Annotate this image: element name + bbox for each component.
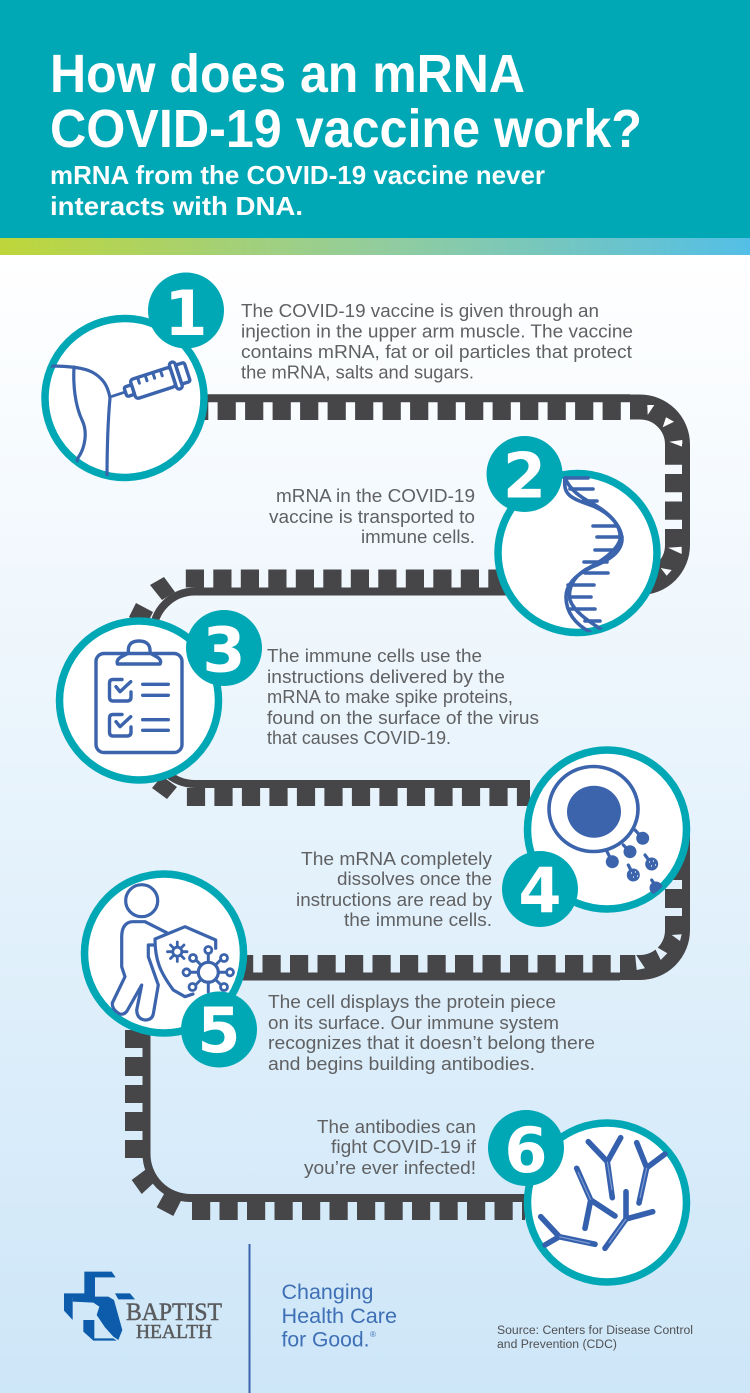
step 2 text	[269, 485, 475, 547]
Baptist Health logo	[64, 1272, 222, 1343]
icon: person with shield against virus	[112, 885, 234, 1020]
step 2 text: mRNA in the COVID-19	[276, 485, 475, 506]
step 3 text: The immune cells use the	[267, 645, 482, 666]
step 1 text	[241, 300, 633, 382]
step 6 text: you’re ever infected!	[304, 1157, 476, 1178]
icon: antibodies	[541, 1138, 665, 1248]
badge 6: 6	[504, 1114, 548, 1187]
step 4 text: The mRNA completely	[301, 848, 493, 869]
badge 1	[148, 272, 224, 350]
source note: Source: Centers for Disease Control	[497, 1325, 693, 1337]
step 5	[84, 874, 257, 1068]
step 5 text: and begins building antibodies.	[268, 1053, 535, 1074]
step 3 text: instructions delivered by the	[267, 666, 505, 687]
step 4	[502, 750, 686, 928]
step 1	[45, 272, 224, 480]
step 1 ring	[45, 318, 204, 478]
source note: and Prevention (CDC)	[497, 1339, 617, 1351]
tagline: Changing	[282, 1281, 374, 1304]
title: How does an mRNA	[50, 44, 525, 104]
source note	[497, 1325, 693, 1351]
logo wordmark: HEALTH	[136, 1321, 212, 1343]
step 3 text: found on the surface of the virus	[267, 707, 539, 728]
step 4 text	[296, 848, 493, 930]
icon: clipboard checklist	[96, 641, 182, 752]
tagline: Health Care	[282, 1305, 397, 1328]
icon: immune cell releasing proteins	[549, 766, 662, 894]
step 6 text: The antibodies can	[317, 1116, 476, 1137]
logo wordmark: BAPTIST	[126, 1299, 222, 1326]
logo wordmark	[126, 1299, 222, 1343]
step 6 ring	[528, 1123, 686, 1282]
title: COVID-19 vaccine work?	[50, 99, 642, 159]
step 3 text: mRNA to make spike proteins,	[267, 686, 513, 707]
step 3 text	[267, 645, 539, 748]
step 1 text: The COVID-19 vaccine is given through an	[241, 300, 599, 321]
badge 2	[486, 436, 562, 512]
step 5 text: on its surface. Our immune system	[268, 1012, 559, 1033]
step 4 text: dissolves once the	[337, 868, 492, 889]
header panel	[0, 0, 750, 255]
badge 3: 3	[202, 614, 246, 686]
step 2 ring	[498, 474, 657, 632]
step 4 ring	[528, 750, 686, 909]
tagline: ®	[370, 1330, 376, 1339]
title	[50, 44, 642, 159]
icon: arm and syringe	[50, 359, 192, 480]
tagline	[282, 1281, 397, 1352]
badge 3	[186, 610, 262, 686]
step 3 ring	[60, 621, 218, 780]
badge 5	[181, 992, 257, 1068]
step 1 text: the mRNA, salts and sugars.	[241, 362, 474, 382]
step 5 text	[268, 991, 595, 1074]
step 6 text	[304, 1116, 477, 1178]
step 2 text: immune cells.	[361, 526, 475, 547]
step 2	[486, 436, 657, 632]
step 6 text: fight COVID-19 if	[331, 1136, 477, 1157]
subtitle	[50, 160, 545, 221]
step 6	[488, 1110, 686, 1282]
badge 4: 4	[518, 854, 562, 928]
step 3	[60, 610, 262, 780]
step 1 text: injection in the upper arm muscle. The vaccine	[241, 320, 633, 342]
step 4 text: the immune cells.	[344, 909, 492, 930]
badge 4	[502, 851, 578, 928]
badge 1: 1	[164, 277, 208, 350]
subtitle: mRNA from the COVID-19 vaccine never	[50, 160, 545, 190]
icon: DNA helix	[565, 478, 622, 632]
step 1 text: contains mRNA, fat or oil particles that protect	[241, 341, 632, 362]
footer divider	[248, 1244, 250, 1393]
step 3 text: that causes COVID-19.	[267, 727, 451, 748]
step 5 ring	[84, 874, 244, 1033]
step 5 text: The cell displays the protein piece	[268, 991, 556, 1012]
logo mark	[64, 1272, 135, 1341]
step 4 text: instructions are read by	[296, 889, 493, 910]
badge 2: 2	[503, 440, 546, 512]
gear track connecting the steps	[125, 398, 686, 1216]
step 2 text: vaccine is transported to	[269, 506, 475, 527]
step 5 text: recognizes that it doesn’t belong there	[268, 1032, 595, 1053]
badge 5: 5	[197, 994, 241, 1067]
tagline: for Good.	[282, 1328, 370, 1352]
badge 6	[488, 1110, 564, 1187]
subtitle: interacts with DNA.	[50, 191, 303, 221]
